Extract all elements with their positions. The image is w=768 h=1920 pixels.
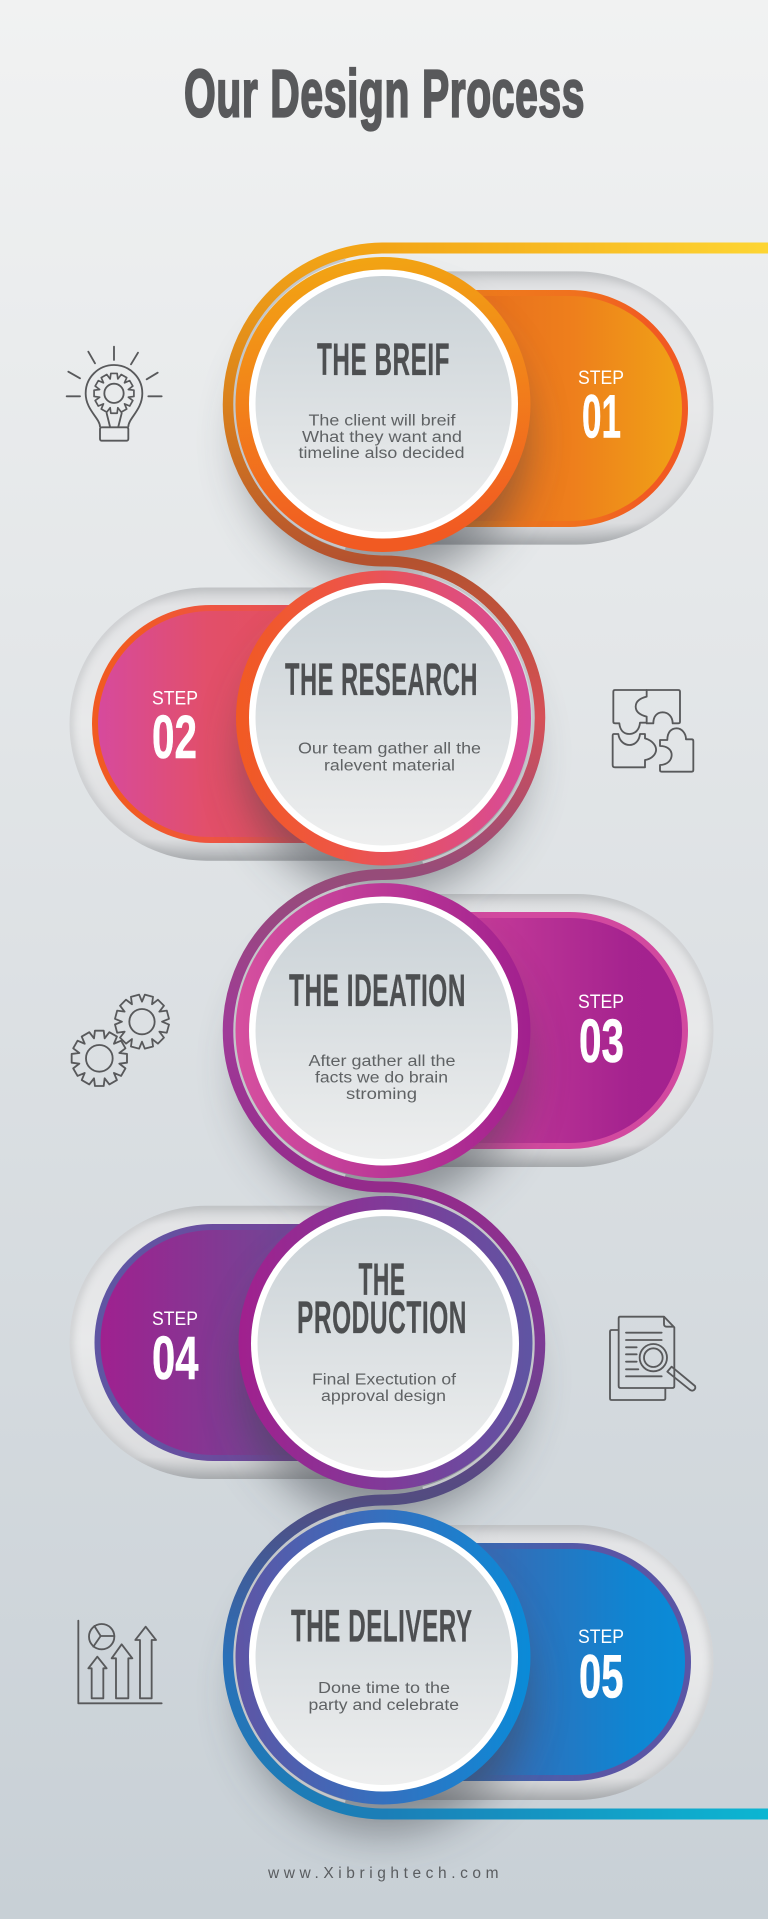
text: brief description: What they want and: [302, 429, 462, 446]
text: ideation description: stroming: [346, 1086, 417, 1103]
heading: the production: PRODUCTION: [297, 1292, 467, 1343]
panel: step 02 pill: 02: [152, 703, 197, 771]
text: ideation description: facts we do brain: [315, 1070, 448, 1086]
text: ideation description: [308, 1053, 456, 1103]
text: production description: approval design: [321, 1388, 446, 1405]
panel: step 03 pill: [439, 894, 714, 1167]
text: delivery description: [308, 1680, 459, 1714]
text: delivery description: party and celebrate: [308, 1697, 459, 1714]
icon: gears: [72, 989, 175, 1086]
icon: puzzle pieces: [613, 690, 693, 772]
panel: step 05 pill: 05: [579, 1643, 624, 1711]
heading: the delivery: THE DELIVERY: [291, 1601, 472, 1652]
text: research description: [298, 740, 481, 774]
circle: the brief: [236, 257, 530, 552]
text: delivery description: Done time to the: [318, 1680, 450, 1697]
circle: the ideation: [236, 883, 530, 1178]
text: production description: [312, 1372, 457, 1405]
text: research description: Our team gather all the: [298, 740, 481, 758]
panel: step 02 pill: STEP: [152, 688, 198, 710]
icon: document with magnifier: [610, 1317, 695, 1400]
text: brief description: timeline also decided: [298, 445, 464, 462]
circle: the production: [238, 1196, 532, 1490]
text: production description: Final Exectution of: [312, 1372, 457, 1388]
panel: step 05 pill: STEP: [578, 1626, 624, 1648]
panel: step 01 pill: STEP: [578, 367, 624, 389]
panel: step 01 pill: [429, 271, 714, 545]
footer website: www.Xibrightech.com: [267, 1865, 498, 1882]
icon: growth chart: [78, 1621, 162, 1703]
heading: the ideation: THE IDEATION: [289, 965, 466, 1016]
icon: light bulb with gear: [67, 347, 162, 441]
panel: step 03 pill: STEP: [578, 991, 624, 1013]
text: research description: ralevent material: [324, 758, 455, 774]
text: brief description: The client will breif: [308, 412, 456, 430]
panel: step 04 pill: STEP: [152, 1308, 198, 1330]
heading: the production: THE: [358, 1254, 406, 1305]
circle: the research: [236, 570, 531, 866]
panel: step 03 pill: 03: [579, 1007, 624, 1075]
text: ideation description: After gather all the: [308, 1053, 456, 1070]
panel: step 04 pill: 04: [152, 1324, 199, 1392]
panel: step 04 pill: [70, 1206, 333, 1479]
panel: step 01 pill: 01: [582, 382, 621, 450]
heading: the research: THE RESEARCH: [285, 654, 478, 705]
ribbon connecting all steps: [228, 248, 768, 1814]
panel: step 05 pill: [420, 1525, 712, 1800]
circle: the delivery: [236, 1510, 530, 1804]
text: brief description: [298, 412, 464, 462]
panel: step 02 pill: [70, 588, 346, 861]
heading: the brief: THE BREIF: [317, 334, 450, 385]
heading: the production: [297, 1254, 467, 1343]
